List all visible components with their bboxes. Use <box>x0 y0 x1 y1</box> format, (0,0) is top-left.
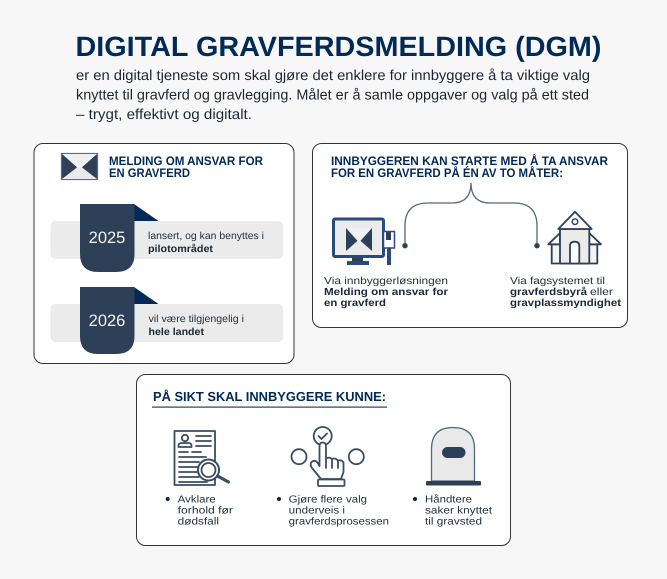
list item: håndtere <box>413 494 492 528</box>
list item: avklare: dødsfall <box>178 517 219 528</box>
panel: to måter <box>312 144 628 328</box>
icon: church <box>548 212 601 264</box>
icon: monitor with mailbox <box>334 219 394 265</box>
heading: melding: EN GRAVFERD <box>109 166 190 180</box>
list item: gjøre flere valg <box>277 495 389 528</box>
list item: avklare: Avklare <box>178 495 216 506</box>
row: 2025: pilotområdet <box>148 243 214 255</box>
list item: gjøre flere valg: Gjøre flere valg <box>289 495 367 506</box>
icon: gravestone <box>426 428 481 486</box>
heading: to måter: FOR EN GRAVFERD PÅ ÉN AV TO MÅTER: <box>331 166 563 180</box>
icon: document with magnifier <box>174 431 228 485</box>
row: 2026: hele landet <box>148 327 205 338</box>
list item: avklare <box>166 495 234 528</box>
list item: avklare: forhold før <box>178 506 234 517</box>
bracket <box>402 183 540 248</box>
icon: envelope <box>62 154 98 180</box>
row: 2025 <box>50 204 283 272</box>
title: DIGITAL GRAVFERDSMELDING (DGM) <box>76 31 602 62</box>
panel: melding om ansvar <box>34 144 294 364</box>
row: 2025: lansert, og kan benyttes i <box>148 231 264 242</box>
heading: to måter: INNBYGGEREN KAN STARTE MED Å TA ANSVAR <box>331 154 608 168</box>
row: 2026 <box>50 287 283 354</box>
intro text: knyttet til gravferd og gravlegging. Målet er å samle oppgaver og valg på ett sted <box>76 88 589 104</box>
list item: håndtere: saker knyttet <box>425 506 492 517</box>
list item: gjøre flere valg: gravferdsprosessen <box>289 517 389 528</box>
row: 2026: vil være tilgjengelig i <box>148 314 244 325</box>
heading: to måter <box>331 154 608 180</box>
list item: håndtere: Håndtere <box>425 494 472 506</box>
text: fagsystem: Via fagsystemet til <box>510 276 605 287</box>
text: fagsystem: eller <box>590 287 614 298</box>
text: innbyggerløsning: Via innbyggerløsningen <box>324 276 448 287</box>
panel: på sikt <box>136 374 510 546</box>
text: innbyggerløsning: Melding om ansvar for <box>324 287 448 298</box>
list item: håndtere: til gravsted <box>425 517 482 528</box>
intro text: er en digital tjeneste som skal gjøre det enklere for innbyggere å ta viktige valg <box>76 68 590 84</box>
intro text: – trygt, effektivt og digitalt. <box>76 107 252 123</box>
intro text <box>76 68 590 123</box>
list item: gjøre flere valg: underveis i <box>289 506 345 517</box>
text: innbyggerløsning <box>324 276 448 309</box>
icon: hand selecting <box>292 427 364 486</box>
row: 2026: 2026 <box>89 312 125 330</box>
text: fagsystem <box>510 276 622 309</box>
row: 2025: 2025 <box>89 229 125 247</box>
text: fagsystem: gravferdsbyrå <box>510 286 587 298</box>
heading: på sikt: PÅ SIKT SKAL INNBYGGERE KUNNE: <box>153 389 386 404</box>
heading: melding <box>109 154 263 180</box>
text: fagsystem: gravplassmyndighet <box>510 298 622 309</box>
text: innbyggerløsning: en gravferd <box>324 298 386 309</box>
heading: melding: MELDING OM ANSVAR FOR <box>109 154 263 168</box>
